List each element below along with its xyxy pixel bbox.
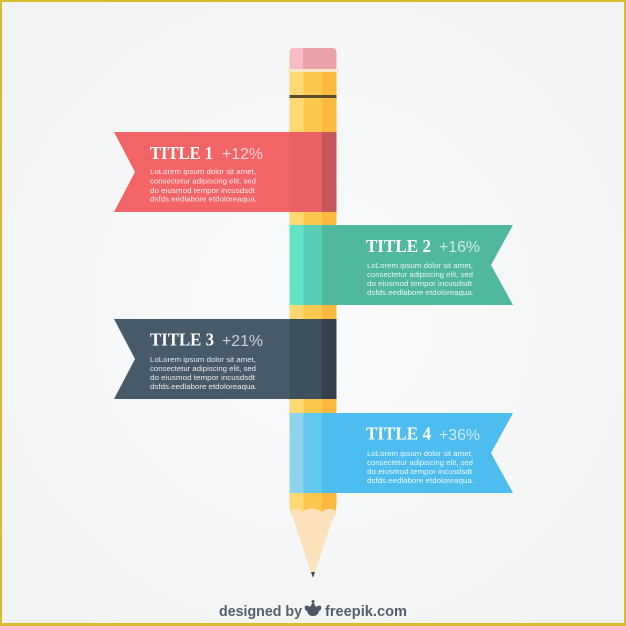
footer credit [219, 600, 407, 620]
ferrule highlight [287, 69, 339, 72]
ribbon 3 [114, 319, 336, 399]
title 1: TITLE 1 [150, 143, 213, 163]
body text 2 [367, 261, 474, 297]
body text 1: dsfds.eedlabore etdoloreaqua. [150, 194, 257, 204]
value 4: +36% [439, 427, 480, 444]
pencil band [290, 95, 336, 98]
body text 4: LoLorem ipsum dolor sit amet, [367, 449, 473, 458]
body text 1: LoLorem ipsum dolor sit amet, [150, 167, 256, 176]
body text 2: consectetur adipiscing elit, sed [367, 270, 473, 279]
icon: freepik crown [305, 600, 321, 616]
body text 4: do eiusmod tempor incusdsdt [367, 467, 473, 476]
value 2: +16% [439, 239, 480, 256]
body text 2: do eiusmod tempor incusdsdt [367, 279, 473, 288]
body text 1 [150, 167, 257, 204]
body text 4: dsfds.eedlabore etdoloreaqua. [367, 476, 474, 485]
pencil [287, 48, 339, 578]
body text 3: dsfds.eedlabore etdoloreaqua. [150, 382, 257, 391]
body text 2: LoLorem ipsum dolor sit amet, [367, 261, 473, 270]
ribbon 4 [290, 413, 513, 493]
footer credit: freepik.com [325, 603, 407, 620]
body text 3 [150, 355, 257, 391]
pencil tip [290, 508, 336, 578]
body text 2: dsfds.eedlabore etdoloreaqua. [367, 288, 474, 297]
eraser [290, 48, 336, 69]
body text 1: do eiusmod tempor incusdsdt [150, 186, 256, 195]
ribbon 1 [114, 132, 336, 212]
ribbon 2 [290, 225, 513, 305]
title 4: TITLE 4 [366, 424, 431, 444]
title 2: TITLE 2 [366, 236, 431, 256]
body text 4: consectetur adipiscing elit, sed [367, 458, 473, 467]
body text 4 [367, 449, 474, 485]
pencil body [290, 69, 336, 515]
body text 3: do eiusmod tempor incusdsdt [150, 373, 256, 382]
body text 1: consectetur adipiscing elit, sed [150, 176, 256, 186]
footer credit: designed by [219, 603, 303, 620]
body text 3: consectetur adipiscing elit, sed [150, 364, 256, 373]
title 3: TITLE 3 [150, 330, 214, 350]
value 3: +21% [222, 333, 263, 350]
body text 3: LoLorem ipsum dolor sit amet, [150, 355, 256, 364]
value 1: +12% [222, 146, 263, 163]
